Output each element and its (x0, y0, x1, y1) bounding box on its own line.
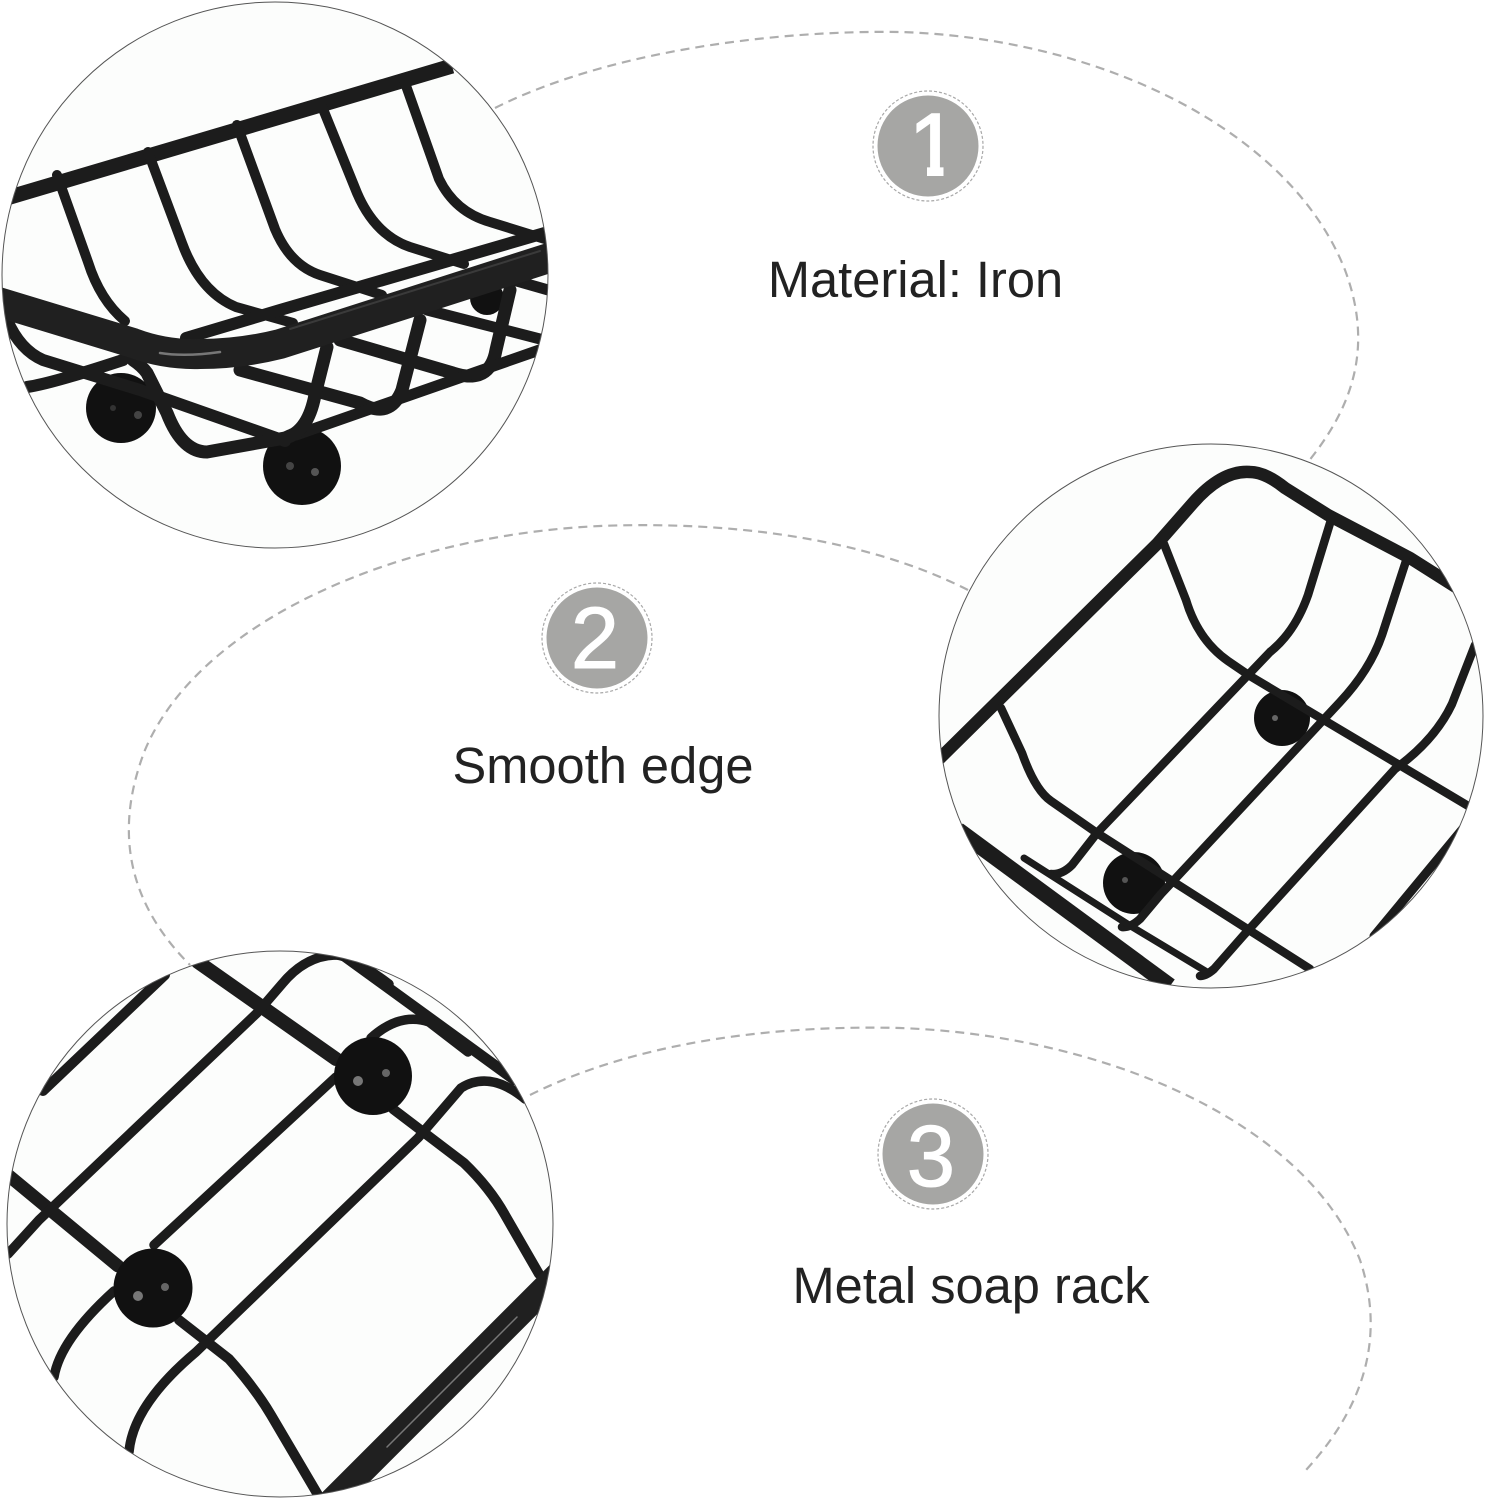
badge 2: 2 (571, 590, 619, 687)
badge 3: 3 (907, 1108, 955, 1205)
label: smooth edge: Smooth edge (453, 737, 753, 794)
dashed connector: middle (129, 525, 968, 965)
icon: rubber foot balls (114, 1037, 412, 1328)
circle outline (2, 2, 548, 548)
circle outline (7, 951, 553, 1497)
icon: rubber foot balls (1103, 690, 1310, 914)
panel: top-left photo circle (0, 2, 552, 548)
icon: rubber foot balls (86, 281, 504, 505)
dashed connector: bottom (530, 1028, 1371, 1470)
wire ribs (0, 66, 552, 452)
badge 1: 1 (909, 95, 958, 194)
badge 3 (878, 1099, 988, 1209)
label: metal soap rack: Metal soap rack (792, 1257, 1150, 1314)
badge 1 (873, 91, 983, 201)
panel: right photo circle (930, 444, 1483, 988)
circle outline (939, 444, 1483, 988)
wire ribs (8, 955, 565, 1500)
wire ribs (930, 472, 1480, 986)
panel: bottom-left photo circle (7, 951, 565, 1500)
dashed connector: top (495, 32, 1358, 462)
label: material: Material: Iron (768, 251, 1063, 308)
badge 2 (542, 583, 652, 693)
